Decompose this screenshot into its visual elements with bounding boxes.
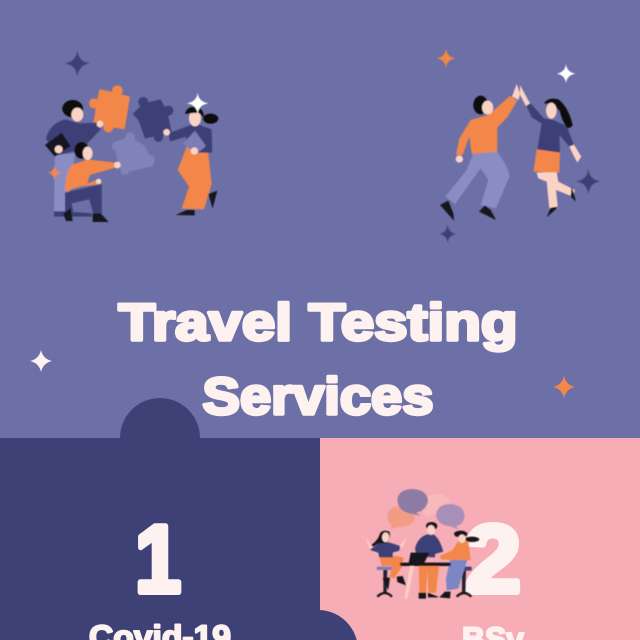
- icon: navy puzzle piece: [133, 97, 173, 142]
- panel: service 2 pink: [320, 438, 640, 640]
- title: Travel Testing: [118, 294, 518, 352]
- illustration: two people high five: [437, 49, 601, 243]
- figure: woman in orange trousers: [163, 93, 218, 215]
- illustration: team meeting at table: [366, 489, 479, 599]
- figure: woman in orange skirt: [520, 85, 581, 217]
- figure: standing man: [45, 100, 103, 217]
- icon: white sparkle left: [30, 350, 52, 372]
- panel: service 1 navy puzzle piece: [0, 398, 357, 640]
- icon: white sparkle: [557, 64, 576, 83]
- number 1: 1: [135, 506, 181, 613]
- stool and seated woman right: [439, 531, 479, 598]
- title: Services: [202, 368, 434, 426]
- icon: navy sparkle: [65, 51, 90, 77]
- figure: crouching man: [63, 142, 121, 222]
- icon: orange sparkle: [437, 49, 455, 68]
- icon: navy sparkle bottom: [439, 224, 456, 243]
- icon: navy sparkle right: [576, 169, 601, 195]
- speech bubbles: [387, 489, 465, 529]
- icon: orange sparkle right: [553, 376, 575, 398]
- title: [118, 294, 518, 426]
- figure: man in orange sweater: [440, 84, 520, 221]
- icon: orange puzzle piece: [89, 85, 130, 132]
- illustration: team solving puzzle: [45, 51, 218, 222]
- number 2: 2: [465, 506, 521, 613]
- man and laptop: [409, 522, 443, 599]
- icon: orange sparkle: [47, 165, 62, 181]
- stool and seated woman left: [366, 531, 407, 597]
- table: [400, 563, 451, 599]
- icon: light puzzle piece: [112, 132, 155, 175]
